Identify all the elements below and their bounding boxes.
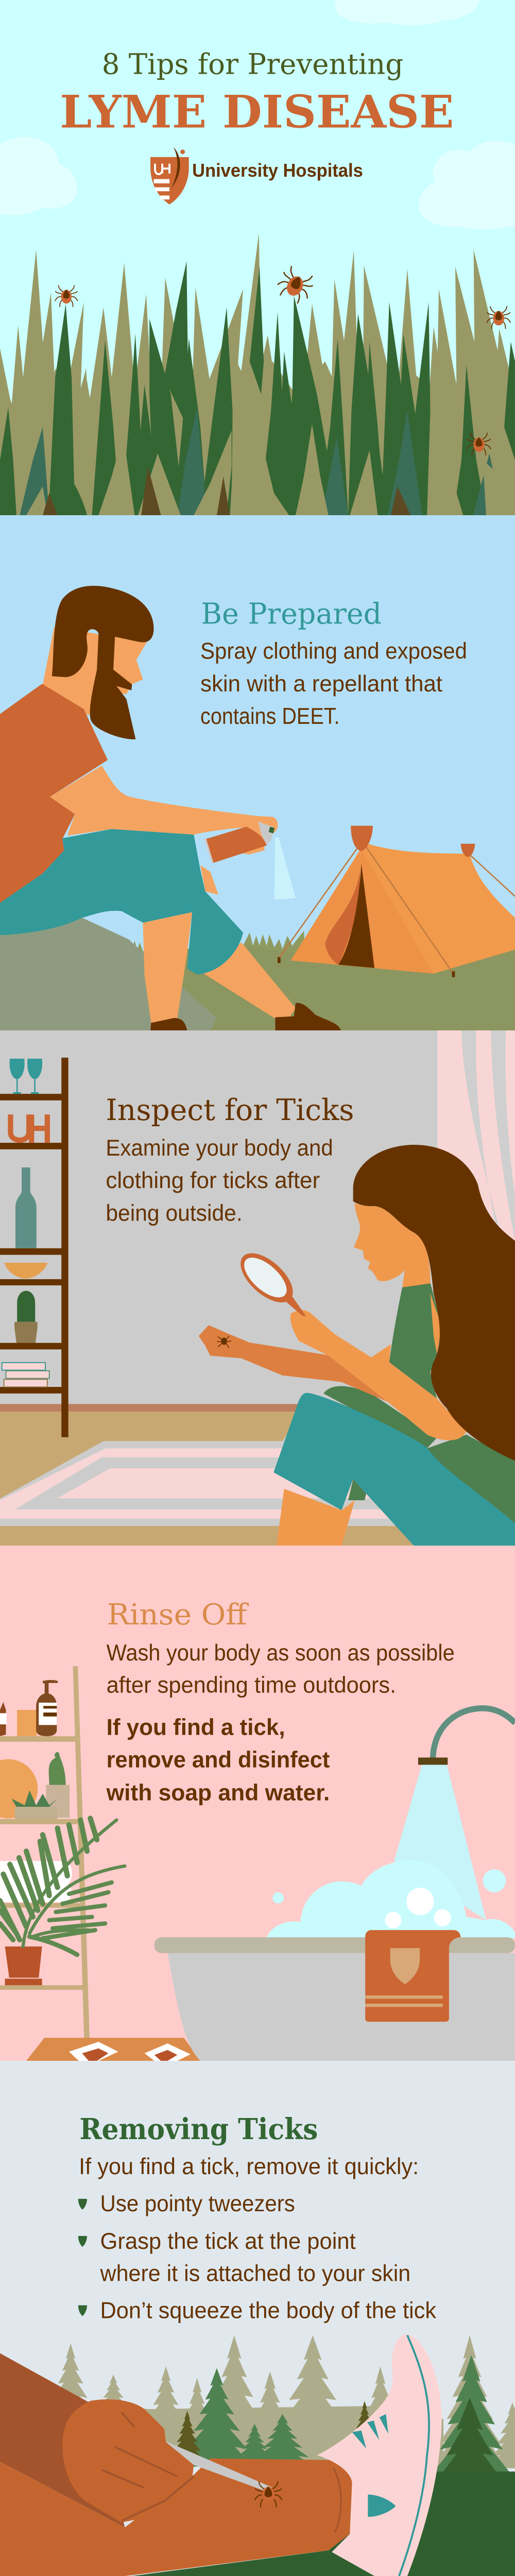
list: removal steps	[78, 2191, 437, 2323]
illustration: hand	[62, 2399, 194, 2522]
legs	[277, 1489, 355, 1546]
illustration: woman	[199, 1145, 515, 1546]
icon: soap pump	[0, 1680, 58, 1736]
text: inspect instructions: Examine your body and	[106, 1136, 333, 1161]
icon: tick on arm	[255, 2482, 282, 2507]
icon: towel	[365, 1930, 460, 2022]
list text: Grasp the tick at the point	[100, 2229, 356, 2254]
far arm	[199, 1325, 391, 1402]
top	[389, 1283, 442, 1398]
ground	[128, 942, 515, 1030]
panel: removing ticks	[0, 2061, 515, 2576]
text: spray instructions: Spray clothing and exposed	[200, 639, 467, 664]
text: if you find a tick: with soap and water.	[106, 1780, 330, 1805]
text: wash instructions	[107, 1640, 455, 1698]
heading: rinse off: Rinse Off	[107, 1598, 249, 1632]
icon: magnifying glass	[232, 1244, 306, 1316]
text: spray instructions	[200, 639, 467, 729]
text: wash instructions: Wash your body as soon as possible	[107, 1640, 455, 1666]
illustration: shower	[394, 1708, 515, 1920]
list text: Use pointy tweezers	[100, 2191, 295, 2216]
icon: tick lower right	[467, 433, 491, 455]
panel: be prepared	[0, 515, 515, 1030]
cloud: left	[0, 137, 77, 215]
list text: Don’t squeeze the body of the tick	[100, 2298, 437, 2323]
face	[354, 1203, 431, 1287]
text: inspect instructions: clothing for ticks after	[106, 1168, 320, 1193]
logo: University Hospitals: University Hospitals	[192, 160, 363, 181]
text: intro: If you find a tick, remove it quickly:	[79, 2154, 419, 2179]
panel: rinse off	[0, 1546, 515, 2061]
title line two: LYME DISEASE	[60, 85, 454, 138]
bullet three	[78, 2306, 87, 2316]
illustration: bath mat	[26, 2038, 200, 2061]
illustration: grass	[0, 233, 515, 515]
hair	[353, 1145, 515, 1461]
illustration: man	[0, 586, 341, 1030]
floor and baseboard	[0, 1404, 515, 1546]
foam and bubbles	[266, 1860, 515, 1938]
right leg	[203, 942, 296, 1018]
icon: cactus	[17, 1291, 35, 1322]
shirt	[0, 684, 108, 903]
background grass tufts	[127, 931, 305, 956]
icon: UH letters	[10, 1114, 47, 1143]
illustration: tent	[278, 826, 515, 977]
icon: tick on right blade	[487, 307, 510, 329]
cloud: right	[419, 141, 515, 229]
near arm	[290, 1310, 467, 1440]
logo: University Hospitals	[150, 147, 363, 205]
illustration: tweezers	[166, 2442, 272, 2492]
cloud: top	[335, 0, 479, 25]
icon: sun plate	[0, 1759, 38, 1818]
panel: header with title and grass	[0, 0, 515, 515]
heading: be prepared: Be Prepared	[201, 597, 382, 631]
hill	[0, 918, 217, 1030]
illustration: shelf	[0, 1058, 68, 1437]
text: spray instructions: skin with a repellant that	[200, 671, 443, 697]
icon: cactus and planter	[11, 1752, 70, 1819]
text: wash instructions: after spending time outdoors.	[107, 1673, 396, 1698]
icon: bowl	[4, 1263, 47, 1279]
icon: tick on left blade	[55, 285, 78, 307]
illustration: bathtub	[154, 1937, 515, 2061]
icon: towels	[0, 1861, 72, 1902]
text: spray instructions: contains DEET.	[200, 704, 339, 729]
list text	[100, 2191, 437, 2323]
icon: wine glasses	[10, 1059, 42, 1094]
illustration: bathroom shelf	[0, 1666, 125, 2061]
icon: books	[2, 1363, 49, 1387]
left leg	[143, 912, 192, 1023]
shorts	[0, 829, 243, 975]
text: inspect instructions: being outside.	[106, 1200, 243, 1226]
icon: bottle	[15, 1167, 37, 1248]
illustration: shoe	[317, 2334, 442, 2576]
bullet two	[78, 2236, 87, 2247]
icon: potted palm	[0, 1818, 125, 1985]
shorts	[273, 1393, 515, 1546]
icon: repellent spray can	[203, 821, 296, 900]
text: if you find a tick	[106, 1715, 330, 1805]
head and arm skin	[43, 627, 278, 895]
panel: inspect for ticks	[0, 1030, 515, 1546]
text: if you find a tick: If you find a tick,	[107, 1715, 285, 1740]
icon: tick on hand	[217, 1336, 231, 1348]
icon: tick on centre blade	[274, 264, 317, 306]
green leggings	[323, 1386, 515, 1523]
rug	[0, 1441, 427, 1526]
heading: inspect for ticks: Inspect for Ticks	[106, 1093, 354, 1127]
curtain	[438, 1030, 515, 1260]
illustration: forest	[44, 2335, 515, 2576]
text: inspect instructions	[106, 1136, 333, 1226]
bullet one	[78, 2199, 87, 2210]
list text: where it is attached to your skin	[100, 2261, 410, 2286]
text: if you find a tick: remove and disinfect	[107, 1748, 330, 1773]
heading: removing ticks: Removing Ticks	[79, 2112, 318, 2146]
illustration: arms	[0, 2353, 352, 2576]
title line one: 8 Tips for Preventing	[102, 48, 403, 81]
hair and beard	[52, 586, 154, 739]
boots	[150, 1003, 341, 1030]
